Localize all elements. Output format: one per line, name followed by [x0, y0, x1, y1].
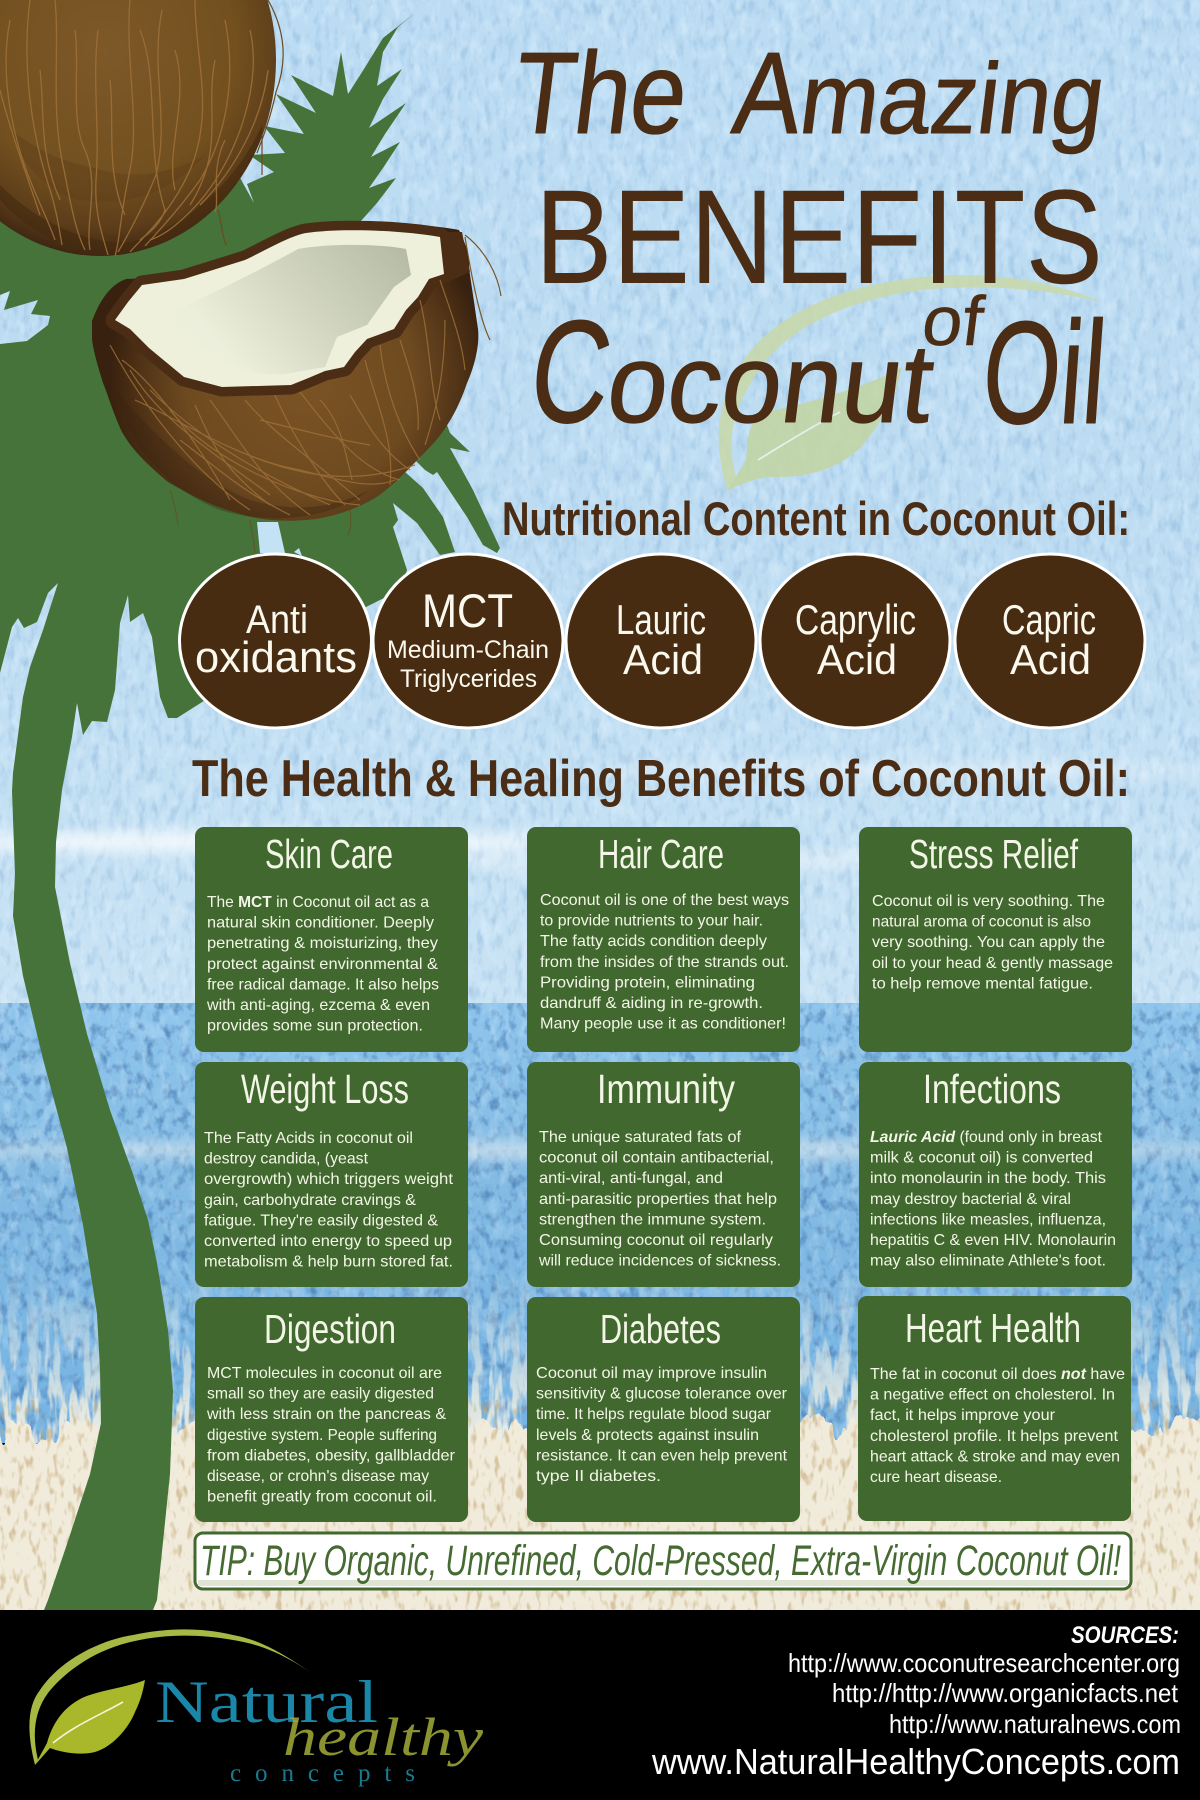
panel: stress relief	[859, 827, 1132, 1052]
title: Oil	[978, 291, 1111, 454]
panel: immunity: strengthen the immune system.	[539, 1211, 766, 1228]
nutrient circle: antioxidants	[180, 554, 372, 728]
nutrient circle: MCT: Medium-Chain	[387, 636, 549, 664]
logo: Natural Healthy Concepts	[29, 1629, 483, 1787]
title: oconut	[601, 320, 940, 446]
panel: hair care: Providing protein, eliminating	[540, 974, 755, 991]
panel: diabetes	[527, 1297, 800, 1522]
nutrient circle: MCT	[373, 554, 563, 728]
sources: www.NaturalHealthyConcepts.com	[651, 1741, 1180, 1782]
nutrient circle: caprylic acid	[760, 554, 950, 728]
panel: immunity: coconut oil contain antibacterial,	[539, 1150, 774, 1167]
panel: infections: into monolaurin in the body. This	[870, 1170, 1106, 1187]
panel: hair care: Coconut oil is one of the best ways	[540, 892, 789, 909]
sources: http://http://www.organicfacts.net	[832, 1678, 1179, 1708]
panel: hair care: Many people use it as conditioner!	[540, 1016, 786, 1033]
panel: heart health: The fat in coconut oil does not have	[870, 1366, 1125, 1383]
panel: heart health: fact, it helps improve your	[870, 1407, 1056, 1424]
panel: hair care: to provide nutrients to your hair.	[540, 913, 763, 930]
panel: weight loss: metabolism & help burn stored fat.	[204, 1254, 453, 1271]
nutrient circle: capric acid: Acid	[1010, 636, 1091, 683]
panel: skin care: The MCT in Coconut oil act as a	[207, 894, 429, 911]
panel: hair care: from the insides of the strands out.	[540, 954, 789, 971]
panel: weight loss: gain, carbohydrate cravings &	[204, 1192, 416, 1209]
panel: heart health: Heart Health	[905, 1305, 1081, 1351]
panel: stress relief: to help remove mental fatigue.	[872, 975, 1093, 992]
panel: stress relief: natural aroma of coconut is also	[872, 914, 1091, 931]
panel: stress relief: Coconut oil is very soothing. The	[872, 893, 1105, 910]
panel: infections: hepatitis C & even HIV. Monolaurin	[870, 1232, 1116, 1249]
panel: weight loss: fatigue. They're easily digested &	[204, 1212, 438, 1229]
panel: diabetes: resistance. It can even help prevent	[536, 1447, 788, 1464]
panel: weight loss: Weight Loss	[241, 1066, 409, 1112]
logo: Natural Healthy Concepts: Natural	[155, 1669, 378, 1735]
title	[507, 28, 1113, 454]
panel: skin care: Skin Care	[265, 831, 393, 877]
panel: skin care: penetrating & moisturizing, they	[207, 935, 438, 952]
panel: immunity: anti-parasitic properties that help	[539, 1191, 777, 1208]
panel: diabetes: Coconut oil may improve insulin	[536, 1365, 767, 1382]
panel: infections: infections like measles, influenza,	[870, 1211, 1106, 1228]
icon: halved coconut	[92, 224, 501, 555]
logo: Natural Healthy Concepts: concepts	[230, 1760, 415, 1787]
panel: immunity: Immunity	[597, 1066, 735, 1112]
sources: SOURCES:	[1071, 1622, 1179, 1649]
panel: heart health	[858, 1296, 1131, 1521]
panel: heart health: cure heart disease.	[870, 1469, 1002, 1486]
title: C	[522, 290, 620, 454]
panel: digestion: with less strain on the pancreas &	[206, 1406, 446, 1423]
icon: whole coconut	[0, 0, 283, 257]
panel: weight loss: The Fatty Acids in coconut oil	[204, 1130, 413, 1147]
nutrient circle: capric acid	[955, 554, 1145, 728]
footer band	[0, 1610, 1200, 1800]
panel: skin care: provides some sun protection.	[207, 1018, 423, 1035]
sources	[651, 1622, 1181, 1782]
panel: stress relief: very soothing. You can apply the	[872, 934, 1105, 951]
panel: diabetes: time. It helps regulate blood sugar	[536, 1406, 772, 1423]
panel: immunity	[527, 1062, 800, 1287]
panel: immunity: will reduce incidences of sickness.	[538, 1253, 781, 1270]
panel: hair care	[527, 827, 800, 1052]
panel: heart health: cholesterol profile. It helps prevent	[870, 1428, 1119, 1445]
panel: immunity: The unique saturated fats of	[539, 1129, 742, 1146]
panel: skin care: natural skin conditioner. Deeply	[207, 915, 434, 932]
panel: digestion: benefit greatly from coconut oil.	[207, 1489, 437, 1506]
nutrient circle: MCT: Triglycerides	[400, 665, 537, 693]
panel: digestion: disease, or crohn's disease may	[207, 1468, 429, 1485]
logo: Natural Healthy Concepts: healthy	[283, 1707, 483, 1767]
panel: stress relief: Stress Relief	[909, 831, 1078, 877]
panel: infections: may also eliminate Athlete's foot.	[870, 1253, 1106, 1270]
palm tree silhouette	[0, 13, 500, 1610]
panel: weight loss	[195, 1062, 468, 1287]
panel: weight loss: overgrowth) which triggers weight	[204, 1171, 454, 1188]
panel: hair care: dandruff & aiding in re-growth.	[540, 995, 763, 1012]
nutrient circle: antioxidants: oxidants	[195, 633, 357, 682]
title: of	[918, 281, 988, 360]
panel: weight loss: converted into energy to speed up	[204, 1233, 452, 1250]
panel: digestion: digestive system. People suffering	[207, 1427, 437, 1444]
panel: hair care: Hair Care	[598, 831, 724, 877]
watermark leaf behind title	[719, 275, 1102, 492]
title: The	[507, 28, 695, 158]
panel: digestion: MCT molecules in coconut oil are	[207, 1365, 442, 1382]
panel: heart health: a negative effect on cholesterol. In	[870, 1387, 1115, 1404]
nutrient circle: capric acid: Capric	[1002, 596, 1096, 643]
panel: digestion	[195, 1297, 468, 1522]
panel: diabetes: levels & protects against insulin	[536, 1427, 759, 1444]
panel: diabetes: type II diabetes.	[536, 1468, 661, 1485]
panel: infections	[859, 1062, 1132, 1287]
panel: digestion: Digestion	[264, 1306, 396, 1352]
panel: digestion: from diabetes, obesity, gallbladder	[207, 1447, 456, 1464]
nutrient circle: lauric acid: Acid	[623, 636, 703, 683]
nutrient circle: MCT: MCT	[422, 584, 513, 637]
panel: skin care: with anti-aging, ezcema & even	[206, 997, 430, 1014]
panel: heart health: heart attack & stroke and may even	[870, 1448, 1120, 1465]
panel: digestion: small so they are easily digested	[207, 1386, 434, 1403]
nutrient circle: lauric acid	[566, 554, 756, 728]
nutrient circle: lauric acid: Lauric	[616, 596, 706, 643]
panel: immunity: Consuming coconut oil regularly	[539, 1232, 773, 1249]
panel: diabetes: Diabetes	[600, 1306, 721, 1352]
title: mazing	[794, 43, 1111, 155]
panel: hair care: The fatty acids condition deeply	[540, 933, 767, 950]
nutrient circle: antioxidants: Anti	[246, 598, 308, 642]
panel: skin care: protect against environmental &	[207, 956, 438, 973]
panel: infections: milk & coconut oil) is converted	[870, 1150, 1093, 1167]
panel: stress relief: oil to your head & gently massage	[872, 955, 1113, 972]
panel: diabetes: sensitivity & glucose tolerance over	[536, 1386, 788, 1403]
panel: skin care: free radical damage. It also helps	[207, 976, 439, 993]
nutrient circle: caprylic acid: Caprylic	[795, 596, 916, 643]
nutrient circle: caprylic acid: Acid	[817, 636, 897, 683]
panel: infections: Lauric Acid (found only in breast	[870, 1129, 1103, 1146]
title: A	[727, 28, 810, 158]
panel: weight loss: destroy candida, (yeast	[204, 1151, 369, 1168]
panel: infections: may destroy bacterial & viral	[870, 1191, 1071, 1208]
panel: skin care	[195, 827, 468, 1052]
panel: immunity: anti-viral, anti-fungal, and	[539, 1170, 723, 1187]
panel: infections: Infections	[923, 1066, 1061, 1112]
title: BENEFITS	[535, 163, 1103, 312]
